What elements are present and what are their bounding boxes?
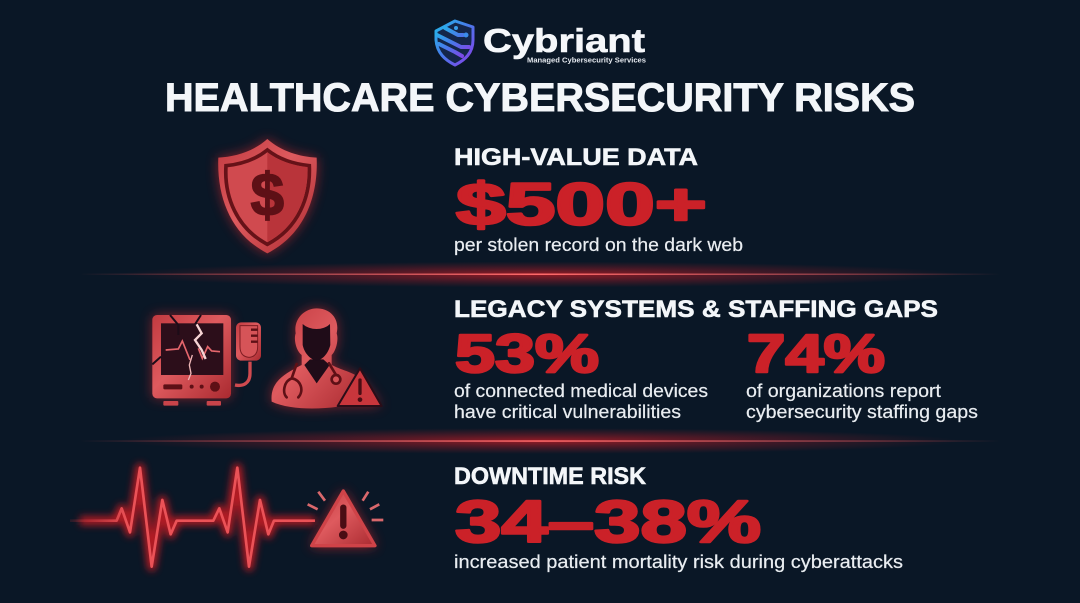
logo — [436, 21, 646, 65]
text block: downtime risk — [454, 463, 903, 572]
description: medical devices: have critical vulnerabilities — [454, 402, 681, 422]
description: medical devices: of connected medical devices — [454, 381, 708, 401]
warning triangle — [338, 368, 382, 406]
description: medical devices — [454, 381, 708, 422]
doctor body — [272, 308, 362, 409]
icon: logo shield — [436, 21, 473, 65]
text block: high-value data — [454, 144, 743, 255]
icon: heartbeat line with warning triangle — [70, 468, 383, 567]
description: staffing gaps — [746, 381, 978, 422]
logo tagline: Managed Cybersecurity Services — [527, 56, 646, 64]
stat: 34–38%: 34–38% — [455, 489, 761, 555]
icon: cracked patient monitor with IV bag — [152, 315, 261, 406]
description: increased patient mortality risk during cyberattacks — [454, 552, 903, 572]
divider 1 — [80, 262, 1000, 288]
logo wordmark: Cybriant — [483, 22, 645, 59]
stat: 53%: 53% — [455, 324, 599, 384]
text block: legacy systems and staffing gaps — [454, 296, 978, 422]
warning triangle — [311, 490, 376, 547]
heading: DOWNTIME RISK — [454, 463, 647, 490]
icon: shield with dollar sign: $ — [251, 162, 284, 229]
stat: 74%: 74% — [747, 324, 885, 384]
icon: doctor with warning triangle — [272, 308, 382, 409]
title: HEALTHCARE CYBERSECURITY RISKS — [165, 76, 915, 120]
description: staffing gaps: of organizations report — [746, 381, 941, 401]
heading: LEGACY SYSTEMS & STAFFING GAPS — [454, 296, 938, 323]
description: per stolen record on the dark web — [454, 235, 743, 255]
heartbeat line — [70, 468, 315, 567]
divider 2 — [80, 428, 1000, 454]
description: staffing gaps: cybersecurity staffing gaps — [746, 402, 978, 422]
warning rays — [308, 492, 383, 520]
heading: HIGH-VALUE DATA — [454, 144, 698, 171]
stat: $500+: $500+ — [456, 172, 707, 238]
icon: shield with dollar sign — [218, 139, 317, 253]
